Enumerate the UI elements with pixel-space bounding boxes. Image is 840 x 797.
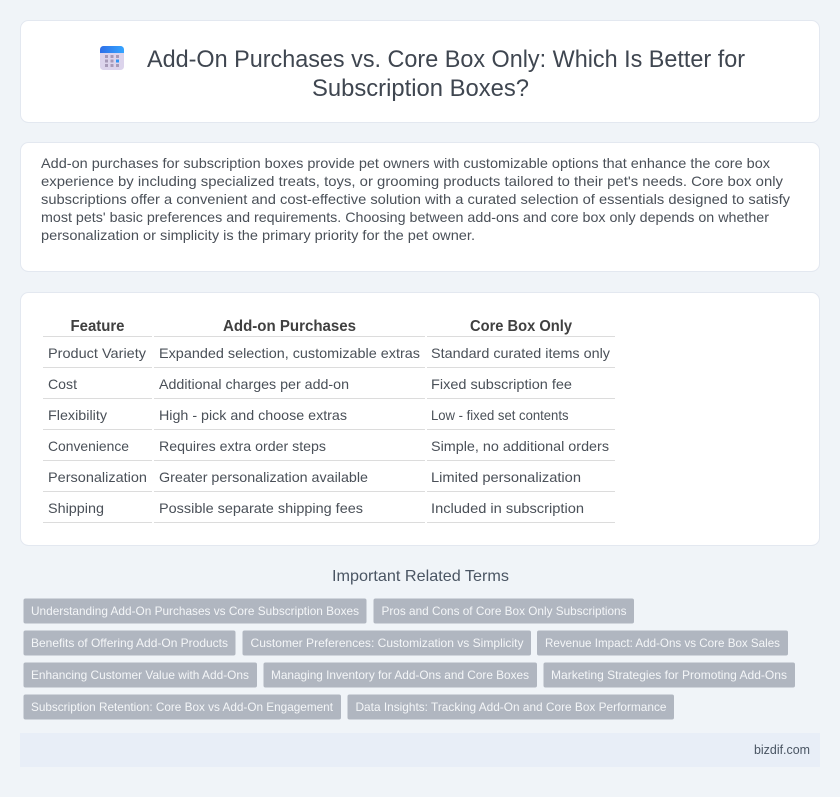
title: Subscription Boxes?: [312, 75, 529, 102]
table row: Flexibility: High - pick and choose extras: [159, 407, 347, 423]
title: [147, 46, 745, 102]
tag: [544, 662, 795, 688]
table row: Shipping: Shipping: [48, 500, 104, 516]
tag: [537, 630, 788, 656]
table header: Core Box Only: [470, 318, 572, 335]
tag: [374, 598, 634, 624]
panel: header: [20, 20, 820, 122]
table row: Convenience: Convenience: [48, 438, 129, 454]
text block: summary: most pets' basic preferences and requirements. Choosing between add-ons and core box only depends on whether: [41, 209, 769, 225]
table row: Personalization: Limited personalization: [431, 469, 581, 485]
table row: Product Variety: [48, 345, 610, 361]
table row: Product Variety: Product Variety: [48, 345, 146, 361]
table row: Product Variety: Expanded selection, customizable extras: [159, 345, 420, 361]
text block: summary: personalization or simplicity is the primary priority for the pet owner.: [41, 227, 475, 243]
table row: Shipping: Possible separate shipping fees: [159, 500, 363, 516]
tag: [24, 662, 257, 688]
table row: Personalization: Personalization: [48, 469, 147, 485]
tag: Marketing Strategies for Promoting Add-Ons: [551, 668, 787, 682]
table row: Personalization: [48, 469, 581, 485]
table header: [70, 318, 572, 335]
table row: Cost: Additional charges per add-on: [159, 376, 349, 392]
tag: [348, 694, 674, 720]
tag: Customer Preferences: Customization vs Simplicity: [250, 636, 524, 650]
table row: Shipping: [48, 500, 584, 516]
table row: Shipping: Included in subscription: [431, 500, 584, 516]
panel: comparison table: [20, 292, 820, 546]
table row: Cost: [48, 376, 572, 392]
title: Add-On Purchases vs. Core Box Only: Which Is Better for: [147, 46, 745, 73]
table row: Cost: Fixed subscription fee: [431, 376, 572, 392]
tag: Benefits of Offering Add-On Products: [31, 636, 228, 650]
table row: Cost: Cost: [48, 376, 77, 392]
tag: Subscription Retention: Core Box vs Add-On Engagement: [31, 700, 334, 714]
tag: Managing Inventory for Add-Ons and Core Boxes: [271, 668, 529, 682]
tag: [24, 630, 236, 656]
footer: bizdif.com: [754, 743, 810, 757]
footer: [20, 733, 820, 767]
table row: Flexibility: Flexibility: [48, 407, 107, 423]
tag: [264, 662, 537, 688]
tag: Data Insights: Tracking Add-On and Core Box Performance: [356, 700, 667, 714]
table row: Product Variety: Standard curated items only: [431, 345, 610, 361]
table row: Personalization: Greater personalization available: [159, 469, 368, 485]
related terms tags: [24, 598, 795, 720]
table row: Flexibility: [48, 407, 568, 423]
tag: [24, 694, 341, 720]
table row: Flexibility: Low - fixed set contents: [431, 407, 568, 423]
table row: Convenience: Requires extra order steps: [159, 438, 326, 454]
tag: Enhancing Customer Value with Add-Ons: [31, 668, 249, 682]
table row: Convenience: [48, 438, 609, 454]
icon: calendar box: [100, 46, 124, 70]
table header: Feature: [70, 318, 125, 335]
heading: related terms: Important Related Terms: [332, 568, 509, 585]
text block: summary: Add-on purchases for subscription boxes provide pet owners with customizable options that enhance the core box: [41, 155, 770, 171]
tag: [242, 630, 531, 656]
tag: Revenue Impact: Add-Ons vs Core Box Sales: [545, 636, 780, 650]
table header: Add-on Purchases: [223, 318, 356, 335]
text block: summary: experience by including specialized treats, toys, or grooming products tailored to their pet's needs. Core box only: [41, 173, 783, 189]
table row: Convenience: Simple, no additional orders: [431, 438, 609, 454]
panel: summary paragraph: [20, 142, 820, 272]
text block: summary: subscriptions offer a convenient and cost-effective solution with a curated selection of essentials designed to satisfy: [41, 191, 790, 207]
tag: Understanding Add-On Purchases vs Core Subscription Boxes: [31, 604, 359, 618]
tag: Pros and Cons of Core Box Only Subscriptions: [382, 604, 626, 618]
text block: summary: [41, 155, 790, 243]
tag: [24, 598, 366, 624]
